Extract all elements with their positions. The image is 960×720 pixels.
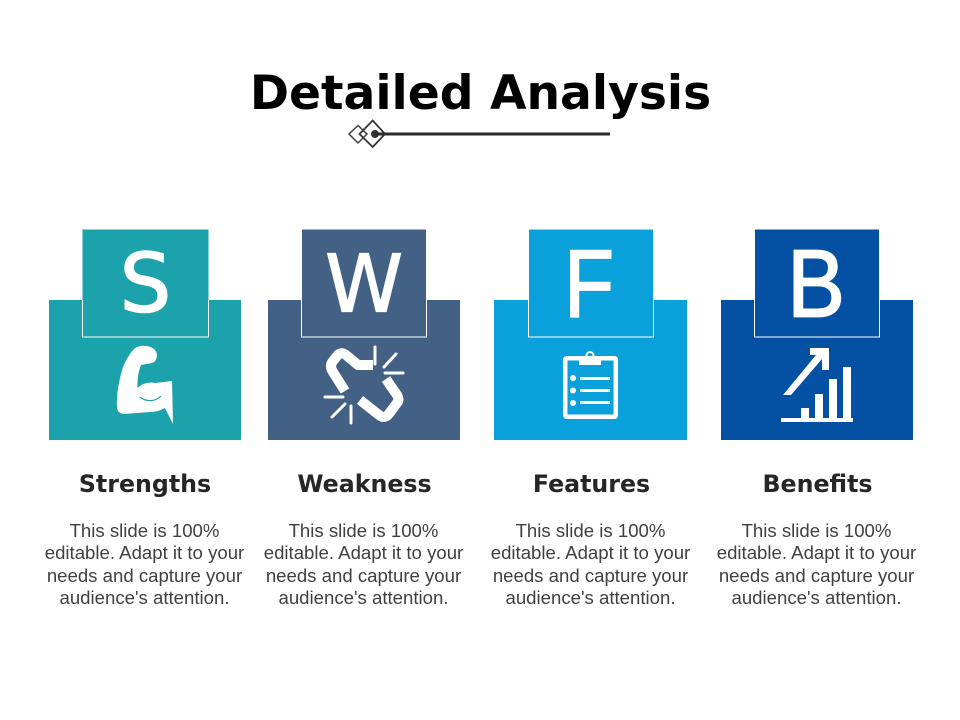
text: strengths description: needs and capture your: [47, 565, 242, 586]
label: Strengths: Strengths: [79, 470, 211, 498]
panel: strengths: [49, 230, 241, 440]
text: weakness description: editable. Adapt it to your: [264, 542, 463, 563]
text: weakness description: [264, 520, 463, 608]
icon: clipboard checklist: [565, 352, 616, 417]
text: weakness description: needs and capture your: [266, 565, 461, 586]
text: features description: This slide is 100%: [516, 520, 665, 541]
text: benefits description: editable. Adapt it to your: [717, 542, 916, 563]
letter W: W: [325, 238, 403, 330]
text: strengths description: editable. Adapt it to your: [45, 542, 244, 563]
title divider with diamonds: [349, 120, 610, 147]
text: benefits description: needs and capture your: [719, 565, 914, 586]
text: features description: editable. Adapt it to your: [491, 542, 690, 563]
text: benefits description: [717, 520, 916, 608]
icon: broken chain link: [325, 347, 403, 423]
panel: benefits: [721, 230, 913, 440]
text: strengths description: This slide is 100%: [70, 520, 219, 541]
text: benefits description: audience's attention.: [732, 587, 902, 608]
label: Benefits: Benefits: [762, 470, 873, 498]
text: features description: [491, 520, 690, 608]
label: Weakness: Weakness: [297, 470, 432, 498]
text: strengths description: audience's attention.: [60, 587, 230, 608]
title: Detailed Analysis: [250, 66, 711, 121]
letter S: S: [120, 238, 171, 332]
text: features description: audience's attention.: [506, 587, 676, 608]
letter B: B: [787, 230, 845, 338]
text: strengths description: [45, 520, 244, 608]
panel: features: [494, 229, 687, 440]
text: weakness description: This slide is 100%: [289, 520, 438, 541]
text: features description: needs and capture your: [493, 565, 688, 586]
label: Features: Features: [533, 470, 650, 498]
text: benefits description: This slide is 100%: [742, 520, 891, 541]
text: weakness description: audience's attention.: [278, 587, 448, 608]
letter F: F: [564, 229, 614, 337]
panel: weakness: [268, 230, 460, 440]
icon: rising bar chart with arrow: [781, 348, 853, 422]
icon: flexed arm: [117, 346, 173, 424]
